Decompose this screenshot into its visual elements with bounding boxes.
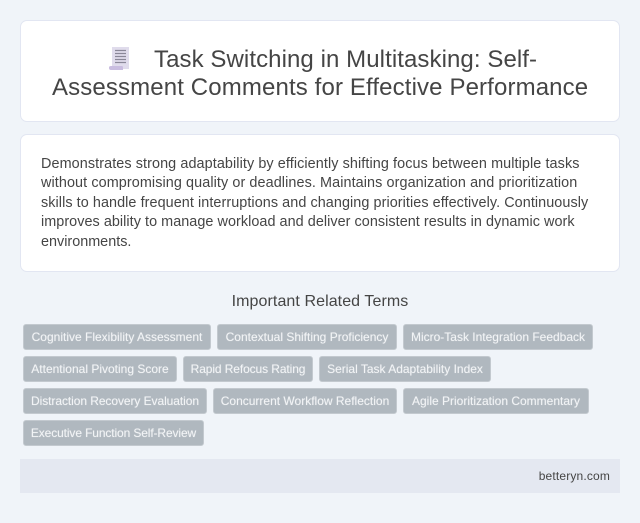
footer bar bbox=[20, 459, 620, 493]
tag: Concurrent Workflow Reflection bbox=[221, 394, 389, 408]
tag: Cognitive Flexibility Assessment bbox=[32, 330, 202, 344]
heading: important related terms: Important Related Terms bbox=[232, 293, 408, 310]
text block: description: skills to handle frequent interruptions and changing priorities effectively. Continuously bbox=[41, 194, 588, 210]
tag bbox=[319, 356, 491, 382]
tag list bbox=[23, 324, 593, 446]
tag: Distraction Recovery Evaluation bbox=[31, 394, 199, 408]
tag bbox=[23, 420, 204, 446]
tag: Attentional Pivoting Score bbox=[31, 362, 169, 376]
icon: document scroll bbox=[109, 47, 129, 70]
tag bbox=[23, 324, 211, 350]
tag: Micro-Task Integration Feedback bbox=[411, 330, 585, 344]
text block: description: without compromising quality or deadlines. Maintains organization and prioritization bbox=[41, 175, 577, 191]
panel: title card bbox=[20, 20, 620, 122]
tag: Rapid Refocus Rating bbox=[191, 362, 305, 376]
tag bbox=[183, 356, 313, 382]
title bbox=[52, 46, 588, 101]
tag: Executive Function Self-Review bbox=[31, 426, 196, 440]
tag: Contextual Shifting Proficiency bbox=[226, 330, 388, 344]
text block: description: environments. bbox=[41, 234, 131, 250]
panel: description card bbox=[20, 134, 620, 272]
footer bar: betteryn.com bbox=[539, 469, 610, 483]
tag: Agile Prioritization Commentary bbox=[412, 394, 580, 408]
title: Assessment Comments for Effective Performance bbox=[52, 74, 588, 101]
tag bbox=[403, 324, 593, 350]
title: Task Switching in Multitasking: Self- bbox=[154, 46, 537, 73]
tag bbox=[403, 388, 589, 414]
text block: description: Demonstrates strong adaptability by efficiently shifting focus between multiple tasks bbox=[41, 156, 580, 172]
tag bbox=[217, 324, 397, 350]
tag bbox=[213, 388, 397, 414]
text block: description bbox=[41, 156, 588, 250]
text block: description: improves ability to manage workload and deliver consistent results in dynamic work bbox=[41, 214, 575, 230]
tag bbox=[23, 388, 207, 414]
tag bbox=[23, 356, 177, 382]
tag: Serial Task Adaptability Index bbox=[327, 362, 483, 376]
